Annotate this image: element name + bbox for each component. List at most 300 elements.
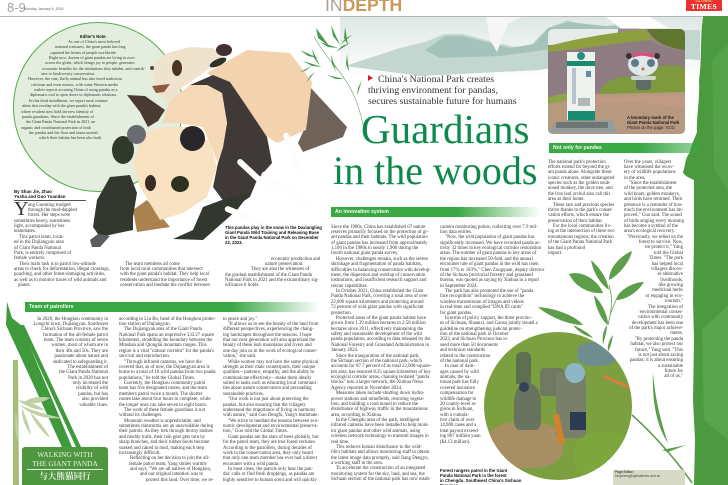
team column 3: tion," Guo told the Global Times. [223, 429, 288, 434]
newspaper logo [686, 0, 722, 11]
photo: forest rangers [484, 332, 632, 480]
team column 3: highly sensitive to human scent and will quickly [223, 478, 317, 483]
ranger front legs [570, 412, 586, 430]
team column 1: women, most of whom are in [51, 343, 108, 348]
innovation column 1: This reduces human disturbance to the wild- [336, 445, 422, 450]
team column 3: Giant pandas are the stars of trees globally, but [228, 435, 319, 440]
team column 3: "It allows us to see the beauty of the land from [228, 322, 318, 327]
innovation column 2: es of Sichuan, Shaanxi, and Gansu jointly issued a [440, 321, 538, 326]
innovation column 2: tivity 32 times in key ecological corridor restoration [440, 246, 541, 251]
innovation column 2: 20 county-level re- [440, 402, 477, 407]
not only column 2 lower: future for [665, 369, 683, 374]
team column 2: kilometers, straddling the boundary between the [119, 338, 212, 343]
team column 1: visibility of wild [76, 386, 108, 391]
innovation column 1: January 2024. [331, 348, 358, 353]
heading: team of patrollers: Team of patrollers [29, 304, 74, 310]
innovation column 2: of the Sichuan provincial forestry and grassland [440, 273, 533, 278]
innovation column 1: Since the 1980s, China has established 67 nature [331, 224, 425, 230]
innovation column 2: animals, the na- [440, 375, 471, 380]
innovation column 1: area, according to Xinhua. [331, 413, 382, 418]
team column 2: without its challenges. [119, 413, 162, 418]
team column 3: understand the importance of living in harmony [223, 408, 316, 413]
team column 3: nomic development and environmental preserva- [223, 424, 318, 429]
innovation column 1: However, challenges remain, such as the severe [336, 257, 428, 262]
not only column 2 lower: The integration of [648, 305, 683, 310]
editor's note: nities that overlap with the giant panda's habitat, [22, 103, 101, 108]
innovation column 1: difficulties in balancing conservation with develop- [331, 268, 431, 272]
not only column 1: impact. [548, 251, 562, 256]
heading: team of patrollers [25, 302, 320, 312]
team column 3: vation," she said. [223, 354, 256, 359]
not only column 2 lower: pandas; it is about ensuring [630, 358, 683, 363]
not only column 2 upper: "Since the establishment [629, 181, 677, 186]
team column 1: pandas, but has [78, 392, 108, 397]
drop cap: Y [14, 198, 28, 220]
not only column 2 lower: medicinal herbs [652, 288, 683, 293]
byline: By Shan Jie, Zhao [14, 188, 52, 194]
team column 1: Park in 2020 has not [68, 376, 108, 381]
team column 2: Reflecting on her decision to join the all- [130, 456, 210, 461]
innovation column 1: a working staff in the area. [331, 461, 383, 466]
not only column 2 lower: told the Global [654, 251, 683, 256]
page editor credit [615, 470, 660, 478]
innovation column 2: ing 807 million yuan [440, 434, 480, 439]
heading: an innovation system [331, 207, 541, 217]
innovation column 1: Since the inauguration of the national park, [336, 354, 420, 358]
heading: not only for pandas: Not only for pandas [553, 145, 602, 151]
innovation column 1: life's habitats and allows monitoring staff to obtain [331, 450, 429, 455]
team column 3: ing landscapes throughout the seasons. I hope [223, 333, 312, 338]
innovation column 1: Agency reported in November 2024. [331, 386, 402, 391]
banner: walking with the giant panda: WALKING WITH [37, 450, 93, 459]
innovation column 1: panda population, according to data released by the [331, 337, 431, 342]
intro story column 1: light, accompanied by her [14, 224, 64, 229]
not only column 2 lower: livelihoods, [660, 278, 683, 283]
date line: Monday January 6, 2025 [24, 7, 64, 11]
photo caption: boundary mark: Photos on the page: VCG [627, 125, 675, 130]
header rule [0, 16, 728, 17]
not only column 1: efforts extend far beyond the gi- [548, 165, 610, 170]
innovation column 1: Measures taken include shutting down hydro- [336, 391, 424, 396]
photo caption: rangers: in Chengdu, Southwest China's Sichuan [440, 478, 521, 483]
team column 1: team. The team consists of seven [44, 338, 108, 343]
team column 2: sharp branches, and their rubber boots become [119, 440, 209, 445]
team column 3: work in the conservation area, they only heard [223, 451, 313, 456]
team column 2: tion station of Dujiangyan. [119, 322, 171, 327]
team column 2: soaked and caked in mud, making each step [119, 446, 204, 450]
photo caption: boundary mark: Giant Panda National Park [627, 120, 679, 125]
team column 3: According to the patrollers, during decades of [223, 446, 312, 450]
innovation column 2: guideline on strengthening judicial protec- [440, 327, 522, 332]
editor's note: Right now, dozens of giant pandas are living in zoos [49, 55, 135, 60]
not only column 2 upper: of birds singing every morning [624, 219, 684, 224]
innovation column 1: real time. [331, 440, 349, 444]
innovation column 2: covered insurance [440, 386, 475, 391]
editor's note: economic benefits for the institutions they inhabit, and contrib- [42, 66, 145, 71]
team column 2: covered that, as of now, the Dujiangyan area is [119, 365, 210, 370]
editor's note: across the globe, which brings joy to people, generates [45, 60, 135, 65]
innovation column 1: protection. [331, 310, 352, 316]
team column 1: The establishment of [67, 365, 108, 370]
editor's note: outlets reports accusing China of using pandas as a [34, 87, 117, 92]
team column 3: with nature," said Guo Dengfu, Yang's teammate. [223, 413, 319, 418]
intro story column 1: poaching, and other forest-damaging activities, [14, 272, 105, 277]
team column 3: das' calls or find fresh droppings, as pandas are [223, 472, 314, 477]
intro story column 1: forest. Her steps were [28, 213, 70, 218]
innovation column 1: tion, and building a road tunnel to reduce the [331, 402, 418, 407]
not only column 2 lower: vation with community [638, 315, 683, 320]
innovation column 2: with a cumula- [440, 413, 469, 418]
team column 3: In most cases, the patrols only hear the pan- [228, 467, 313, 472]
team column 2: and says, "We are all natives of Hongkou, [130, 467, 211, 472]
not only column 2 upper [624, 160, 684, 234]
intro story column 2: with the giant panda's habitat. They help local [120, 272, 209, 277]
team column 3: for the patrol team, they are true forest recluses. [223, 440, 316, 445]
team column 2: region is a vital "natural corridor" for the panda's [119, 349, 214, 354]
banner: walking with the giant panda: THE GIANT PANDA [32, 459, 98, 468]
editor's note circle [13, 22, 183, 192]
innovation column 2: In case of dam- [445, 364, 475, 369]
team column 1: In 2020, the Hongkou community in [37, 316, 108, 322]
team column 1: valuable clues. [79, 402, 108, 408]
not only column 2 lower: "Previously, we relied on the [627, 235, 683, 240]
innovation column 2: face recognition" technology to achieve the [440, 294, 524, 299]
innovation column 2: ($4.13 million). [440, 440, 471, 444]
not only column 1: iconic creatures, other endangered [548, 176, 614, 181]
subheading with arrow: China's National Park creates [378, 74, 494, 84]
not only column 1: nosed monkey, the dove tree, and [548, 186, 613, 191]
page number: 8-9 [7, 0, 26, 15]
not only column 1: preservation of their habitat. [548, 219, 603, 224]
team column 2: survival and reproduction. [119, 354, 170, 359]
team column 1: their 40s and 50s. They are [56, 349, 108, 354]
intro story column 3: They are also the witnesses of [251, 267, 309, 272]
innovation column 2: ages caused by wild [440, 370, 479, 375]
not only column 2 lower: all of us." [664, 374, 683, 379]
intro story column 1 [14, 202, 110, 288]
team column 3: suited to tasks such as educating local communi- [223, 381, 318, 386]
intro story column 2 [120, 262, 210, 288]
innovation column 1: tor giant pandas and other wild animals, using [331, 429, 420, 434]
innovation column 1: Protected areas of the giant panda habitat have [336, 316, 426, 321]
innovation column 1: accounts for 87.7 percent of its total 22,000-square- [331, 364, 431, 369]
innovation column 1: fourth national giant panda survey. [331, 251, 398, 256]
innovation column 2: camera monitoring points, collecting over 7.9 mil- [440, 224, 538, 230]
photo caption: pandas: This pandas play in the snow in the Daxiangling [225, 225, 322, 230]
team column 3: strength as their male counterparts, their unique [223, 365, 315, 370]
photo caption: pandas: Giant Panda Wild Training and Releasing Base [225, 230, 319, 235]
innovation column 2: tional park has fully [440, 380, 479, 385]
photo caption: pandas: in the Giant Panda National Park on December [225, 235, 319, 240]
intro story column 3: nificance it holds. [225, 283, 260, 288]
innovation column 2: "Now, the wild population of giant pandas has [445, 235, 534, 240]
team column 2: increasingly difficult. [119, 451, 161, 456]
not only column 1: ant panda alone. Alongside these [548, 170, 612, 175]
misty mountain backdrop [340, 17, 702, 79]
heading: an innovation system: An innovation system [335, 209, 389, 215]
innovation column 2: lion data entries. [440, 230, 472, 235]
innovation column 1: wireless network technology to transmit images in [331, 434, 429, 439]
ranger blue cap [565, 363, 585, 383]
intro story column 1: through the mud-dappled [28, 208, 77, 213]
intro story column 3 [225, 256, 320, 288]
innovation column 1: National Forestry and Grassland Administration in [331, 343, 429, 348]
team column 3: communicate effectively—make them ideally [223, 376, 312, 381]
innovation column 1: To accelerate the construction of an integrated [336, 466, 425, 471]
team column 3: that our next generation will also appreciate the [223, 338, 315, 343]
innovation column 2: wildlife damage to [440, 396, 476, 402]
editor's note: which their habitat has been also built. [39, 135, 102, 140]
team column 2: populations," he told the Global Times. [119, 376, 195, 381]
banner: walking with the giant panda: 与大熊猫同行 [39, 471, 91, 481]
not only column 2 lower: has helped local [652, 262, 683, 267]
innovation column 2: total payout exceed- [440, 429, 479, 434]
photo caption: rangers: Panda National Park in the forest [440, 473, 507, 478]
not only column 2 upper: Over the years, villagers [624, 160, 671, 164]
not only column 2 upper: ery of wildlife populations [624, 170, 676, 175]
intro story column 3: the gradual establishment of the Giant Panda [225, 273, 312, 278]
not only column 2 lower: ments. [670, 331, 683, 336]
intro story column 2: conservation and mediate the conflict between [120, 283, 210, 288]
page editor box [613, 470, 685, 485]
not only column 1: has had a profound [548, 246, 585, 250]
not only column 2 lower: forest to survive. Now, [639, 240, 683, 245]
innovation column 1: disturbance of highway traffic in the mountainous [331, 407, 428, 412]
innovation column 1: safety and sustainable development of the wild [331, 332, 422, 337]
team column 2: their patrols. As they trek through thorny bushes [119, 429, 213, 434]
page editor credit: bingcheng@globaltimes.com.cn [615, 474, 660, 478]
team column 2: female patrol team, Yang smiles warmly [129, 462, 207, 467]
team column 3 [223, 316, 319, 483]
team column 1: also provided [82, 397, 108, 402]
ranger reaching arm [603, 374, 629, 389]
not only column 1: the iron leaf orchid also call this [548, 192, 610, 197]
not only column 2 upper: has become a symbol of the [624, 224, 678, 229]
editor's note: utes to biodiversity conservation. [41, 71, 95, 76]
not only column 2 upper: wild boars, golden monkeys, [624, 192, 680, 197]
page editor credit: Page Editor: [615, 470, 634, 474]
team column 2: and muddy trails, their rain gear gets torn by [119, 435, 205, 440]
not only column 2 lower: er alternative [658, 272, 683, 277]
not only column 1: For the local communities liv- [553, 224, 612, 229]
not only column 2 upper: area's ecological recovery. [624, 229, 675, 234]
innovation column 1: In the Chengdu area of the park, intelligent [336, 418, 419, 423]
ranger arm [553, 414, 565, 444]
innovation column 2: for giant pandas. [440, 310, 472, 316]
team column 2: protect this land. Over time, we re- [146, 478, 214, 483]
team column 2: National Park spans an impressive 333.27 square [119, 333, 214, 338]
ranger middle cap [519, 382, 529, 392]
innovation column 1: km area, has restored 8.25 square kilometers of key [331, 370, 431, 375]
editor's note: diplomatic tool to open doors to diplomatic relations. [30, 92, 117, 97]
team column 2: team has five designated routes, and the team [119, 386, 207, 391]
innovation column 1 [331, 224, 432, 482]
not only column 2 lower: villagers discov- [651, 267, 683, 272]
intro story column 1: areas to check for deforestation, illegal crossings, [14, 267, 110, 272]
intro story column 1: sometimes heavy, sometimes [14, 219, 70, 224]
innovation column 1: rescue capabilities. [331, 284, 368, 289]
not only column 1: area as their home. [548, 197, 585, 202]
team column 1: the Giant Panda National [59, 370, 108, 375]
team column 2: members patrol twice a month. The shorter [119, 392, 202, 397]
innovation column 2: in September 2024. [440, 284, 478, 289]
intro story column 1: Their main task is to patrol low-altitude [19, 262, 96, 267]
team column 2: Currently, the Hongkou community patrol [124, 381, 205, 386]
innovation column 1: shrinkage and fragmentation of panda habitats, [331, 262, 422, 267]
innovation column 1: institutions, and insufficient research support and [331, 278, 426, 283]
innovation column 2: 2023, and Sichuan Province has is- [440, 337, 508, 342]
ranger pack [540, 368, 564, 396]
innovation column 2: gions in Sichuan, [440, 407, 474, 412]
photo: boundary mark [548, 29, 685, 134]
not only column 2 upper: proved," Guo said. The sound [624, 213, 682, 218]
innovation column 2 [440, 224, 544, 444]
not only column 2 upper: and birds have returned. Their [624, 197, 682, 202]
innovation column 2: wireless transmission of images and videos [440, 300, 524, 305]
intro story column 1: of Giant Panda National [14, 246, 61, 250]
not only column 2 lower: of the park's major achieve- [629, 326, 683, 331]
not only column 2 lower: future," Yang said. "This [635, 348, 683, 353]
team column 3: qualities—patience, empathy, and the ability to [223, 370, 314, 375]
team column 2: sometimes rainstorms are an unavoidable during [119, 424, 213, 429]
newspaper logo: TIMES [691, 2, 717, 11]
intro story column 1: ang Guoming trudged [28, 202, 71, 208]
team column 1: dedicated to safeguarding it. [53, 360, 108, 364]
intro story column 1: teammates. [14, 229, 36, 234]
innovation column 1: of giant pandas has increased from approximately [331, 241, 428, 246]
innovation column 2: compensation for [440, 391, 474, 396]
editor's note: where resident now hold the new identity of [21, 109, 93, 114]
innovation column 2: significantly increased. We have recorded panda ac- [440, 241, 541, 246]
team column 2: The work of these female guardians is not [124, 408, 205, 413]
innovation column 1: In October 2021, China established the Giant [336, 289, 423, 294]
intro story column 1: ed in the Dujiangyan area [14, 240, 64, 245]
innovation column 2: tion of the national park in October [440, 332, 508, 337]
not only column 2 lower: environmental conser- [640, 310, 683, 315]
not only column 1: vation efforts, which ensure the [548, 213, 609, 218]
team column 3: to peace and joy." [223, 316, 257, 322]
team column 3: While women may not have the same physical [228, 360, 318, 364]
subheading with arrow: thriving environment for pandas, [368, 84, 498, 96]
not only column 2 upper: have witnessed the recov- [624, 165, 674, 170]
editor's note: national treasures, the giant panda has long [55, 44, 126, 49]
intro story column 2: from local rural communities that intersect [120, 267, 203, 272]
team column 1: China's Sichuan Province, saw the [41, 327, 108, 332]
not only column 2 lower [627, 234, 683, 379]
not only column 2 lower: is not just about saving [638, 353, 683, 358]
not only column 1 [548, 160, 615, 256]
innovation column 1: ment, the dispersion and overlap of conservation [331, 273, 425, 278]
team column 2: Minshan and Qionglai mountain ranges. This [119, 343, 207, 348]
team column 1: passionate about nature and [54, 354, 108, 359]
innovation column 1: blocks" into a larger network, the Xinhua News [331, 380, 423, 385]
editor's note: In this third installment, we report rural commu- [29, 98, 108, 103]
not only column 2 lower: habitat, we also protect our [630, 342, 683, 347]
title: Guardians [361, 106, 530, 152]
subheading with arrow [368, 74, 517, 106]
panda photo [90, 44, 347, 247]
innovation column 1: ant pandas and their habitats. The wild population [331, 235, 428, 240]
innovation column 1: hectares since 2011, effectively maintaining the [331, 327, 423, 332]
innovation column 2: sued more than 50 documents [440, 343, 498, 348]
not only column 1: mountainous regions, the creation [548, 235, 614, 240]
innovation column 2: in real-time and compiled "DNA ID cards" [440, 305, 523, 310]
banner: walking with the giant panda [22, 447, 108, 485]
not only column 1: These rare and precious species [553, 202, 614, 208]
intro story column 1: as well as to monitor traces of wild animals and [14, 278, 106, 283]
innovation column 1: monitoring system for the sky, land, and sea, the [331, 472, 425, 477]
innovation column 1: 22,000 square kilometers and protecting around [331, 300, 424, 305]
not only column 2 lower: or engaging in eco- [645, 294, 683, 299]
intro story column 2: The team members all come [125, 262, 180, 266]
byline [14, 188, 86, 201]
innovation column 1: reserves primarily focused on the protection of gi- [331, 230, 428, 235]
team column 3: one day join us in the work of ecological conser- [223, 349, 317, 354]
innovation column 1: the Sichuan section of the national park, which [331, 359, 422, 364]
not only column 2 upper: in the area. [624, 176, 645, 181]
title line 2: in the woods [333, 148, 537, 193]
photo caption: pandas: 23, 2023. [225, 240, 243, 245]
not only column 1: species such as the golden snub- [548, 181, 611, 186]
innovation column 2: In terms of policy support, the three provinc- [445, 316, 532, 321]
innovation column 1: grown from 1.39 million hectares to 2.58 million [331, 321, 426, 326]
team column 2: Mountain weather is unpredictable, and [124, 419, 201, 424]
innovation column 1: the latest image data promptly, said Jiang Dengyu, [331, 456, 429, 461]
innovation column 2: areas. The number of giant pandas in key areas of [440, 251, 536, 256]
not only column 2 lower: a sustainable [658, 364, 683, 369]
heading: not only for pandas [549, 143, 700, 153]
team column 3: sustainable practices. [223, 392, 264, 397]
team column 2: home to a total of 16 wild pandas from two panda [119, 370, 216, 375]
innovation column 2: of the national park. [440, 359, 479, 364]
intro story column 2: residents understand the importance of forest [120, 278, 207, 283]
not only column 1: of the Giant Panda National Park [548, 240, 612, 245]
editor's note: captured the hearts of people worldwide. [50, 50, 117, 55]
editor's note: the Giant Panda National Park in 2021, an [26, 119, 95, 124]
team column 2: the longer ones can take seven to eight hours. [119, 402, 207, 408]
editor's note: organic and coordinated protection of both [21, 125, 91, 130]
team column 3: beauty of these lush mountains and rivers and [223, 343, 312, 348]
sign post [567, 52, 595, 120]
intro story column 1: Park, is entirely comprised of [14, 251, 71, 256]
not only column 2 upper: of the protected area, the [624, 186, 672, 191]
ranger middle [514, 384, 541, 430]
team column 2: according to Liu Bo, head of the Hongkou protec- [119, 316, 216, 322]
panda mascot statue [626, 52, 660, 90]
editor's note: As one of China's most beloved [68, 39, 120, 44]
team column 2: and our original intention was to [140, 472, 203, 477]
innovation column 1: 1,100 in the 1980s to nearly 1,900 during the [331, 246, 418, 251]
not only column 2 lower: tourism." [665, 299, 683, 304]
editor's note: the pandas and the flora and fauna around [29, 130, 98, 135]
team column 3: that only one team member has ever had a direct [223, 456, 317, 461]
subheading with arrow: secures sustainable future for humans [368, 96, 517, 106]
not only column 2 lower: "By protecting the panda [635, 337, 683, 342]
innovation column 1: infrared cameras have been installed to help moni- [331, 423, 429, 428]
team column 2: The Dujiangyan area of the Giant Panda [124, 327, 202, 332]
intro story column 1: female workers. [14, 256, 45, 261]
not only column 2 lower: development has been one [632, 321, 683, 326]
team column 3: "Our work is not just about protecting the [228, 397, 309, 402]
intro story column 3: National Park in 2021 and the extraordinary sig- [225, 278, 319, 283]
editor's note [21, 34, 146, 140]
innovation column 2: bureau, was quoted as saying by Xinhua in a report [440, 278, 539, 283]
intro story column 1: This patrol team, locat- [19, 235, 64, 240]
not only column 1: ing at the intersection of these two [548, 229, 615, 234]
photo caption: rangers: Forest rangers patrol in the Giant [440, 468, 507, 472]
not only column 2 lower: like growing [658, 283, 683, 288]
team column 3: "We strive to mediate the tension between eco- [228, 419, 319, 424]
